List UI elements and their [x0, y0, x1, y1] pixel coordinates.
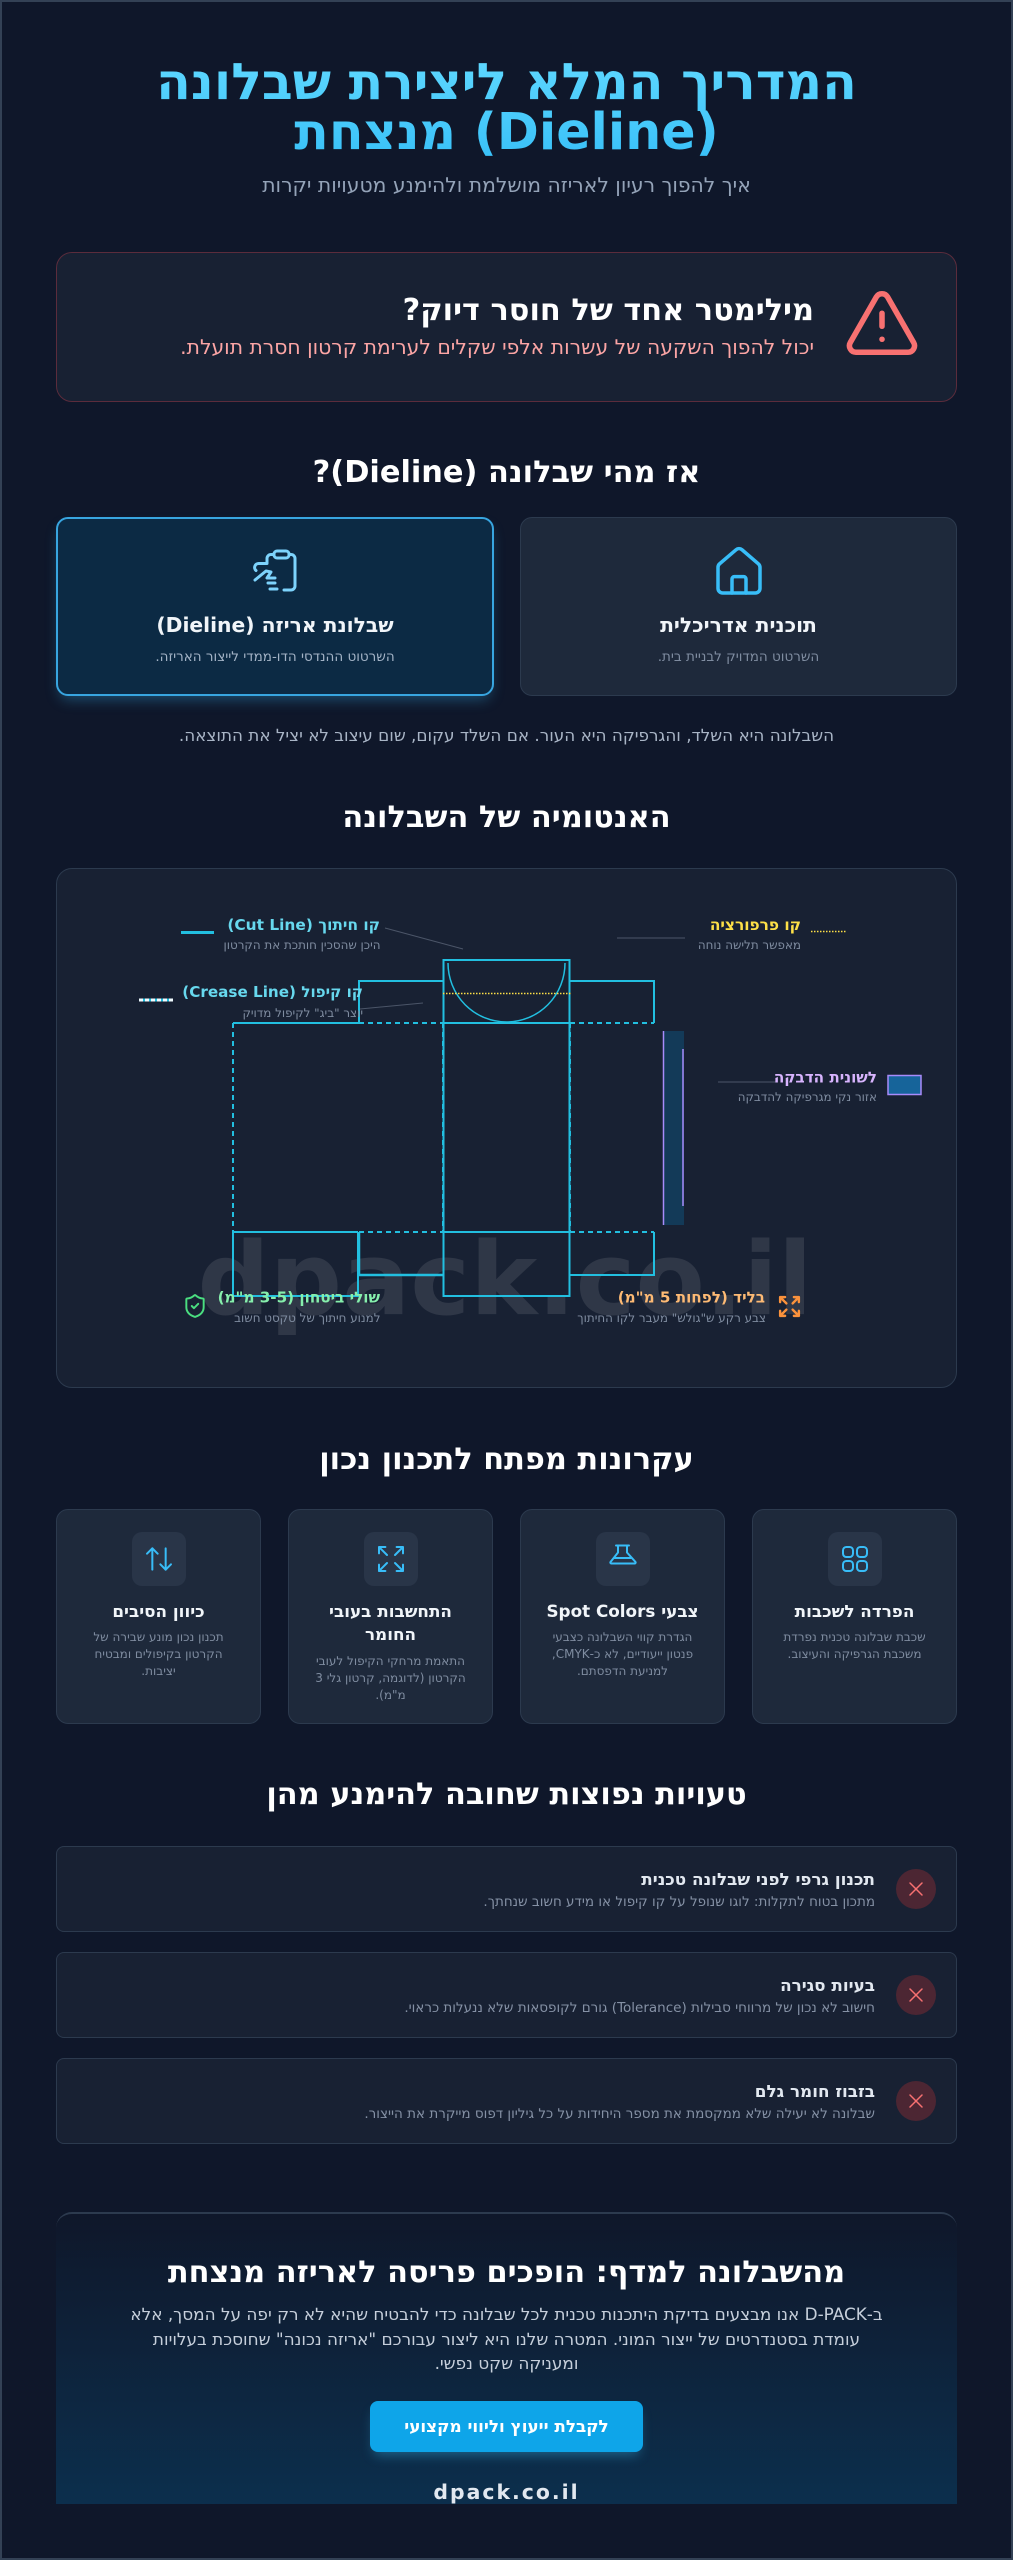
card description: השרטוט ההנדסי הדו-ממדי לייצור האריזה. [155, 649, 395, 665]
card text: פנטון ייעודיים, לא כ-CMYK, [552, 1647, 693, 1661]
icon: x [896, 1975, 936, 2015]
title: המדריך המלא ליצירת שבלונה [156, 52, 857, 111]
icon: x [896, 2081, 936, 2121]
perforation line [443, 992, 571, 994]
CTA text: ומעניקה שקט נפשי. [435, 2353, 578, 2373]
leader lines [360, 928, 777, 1082]
card text: משכבת הגרפיקה והעיצוב. [788, 1647, 922, 1661]
card title: הפרדה לשכבות [795, 1601, 914, 1621]
mistake text: מתכון בטוח לתקלות: לוגו שנופל על קו קיפול או מידע חשוב שנחתך. [483, 1894, 875, 1910]
legend: perforation line [698, 916, 846, 952]
warning text: יכול להפוך השקעה של עשרות אלפי שקלים לערימת קרטון חסרת תועלת. [180, 335, 814, 359]
mistake text: שבלונה לא יעילה שלא ממקסמת את מספר היחידות על כל גיליון דפוס מייקרת את הייצור. [364, 2106, 875, 2122]
panel: warning callout [56, 252, 957, 402]
card text: מ"מ). [375, 1688, 406, 1702]
legend: safety margin: שולי ביטחון (3-5 מ"מ) [218, 1288, 380, 1306]
card text: תכנון נכון מונע שבירה של [93, 1630, 224, 1644]
icon: up down arrows [132, 1532, 186, 1586]
panel: layers card [752, 1509, 957, 1724]
card title: שבלונת אריזה (Dieline) [156, 613, 394, 637]
legend: crease line: יוצר "ביג" לקיפול מדויק [242, 1006, 363, 1020]
panel: call to action [56, 2212, 957, 2504]
card text [783, 1630, 926, 1661]
panel: dieline card [56, 517, 494, 696]
mistake title: בזבוז חומר גלם [755, 2081, 875, 2101]
card text: למניעת הדפסתם. [577, 1664, 668, 1678]
CTA button: לקבלת ייעוץ וליווי מקצועי [404, 2416, 609, 2436]
card text: שכבת שבלונה טכנית נפרדת [783, 1630, 926, 1644]
icon: clipboard pen [253, 550, 296, 592]
legend: bleed: בליד (לפחות 5 מ"מ) [618, 1288, 765, 1306]
card title: כיוון הסיבים [112, 1601, 205, 1621]
mistake text: חישוב לא נכון של מרווחי סבילות (Tolerance) גורם לקופסאות שלא ננעלות כראוי. [404, 2000, 875, 2016]
panel: mistake 1 [56, 1846, 957, 1932]
card text: הקרטון (לדוגמה, קרטון גלי 3 [315, 1671, 466, 1685]
panel: anatomy diagram [56, 868, 957, 1388]
card description: השרטוט המדויק לבניית בית. [658, 649, 819, 665]
card text [552, 1630, 693, 1678]
card title: צבעי Spot Colors [546, 1601, 699, 1621]
explanatory text: השבלונה היא השלד, והגרפיקה היא העור. אם השלד עקום, שום עיצוב לא יציל את התוצאה. [179, 725, 834, 745]
card text: התאמת מרחקי הקיפול לעובי [316, 1654, 465, 1668]
heading: common mistakes: טעויות נפוצות שחובה להימנע מהן [266, 1777, 747, 1812]
card text: הקרטון בקיפולים ומבטיח [94, 1647, 223, 1661]
legend: cut line [181, 916, 380, 952]
legend: cut line: קו חיתוך (Cut Line) [227, 916, 380, 934]
title [0, 57, 1013, 161]
card text: הגדרת קווי השבלונה כצבעי [553, 1630, 692, 1644]
title: (Dieline) מנצחת [294, 102, 719, 161]
legend: bleed: צבע רקע ש"גולש" מעבר לקו החיתוך [577, 1311, 766, 1325]
legend: crease line: קו קיפול (Crease Line) [182, 983, 363, 1001]
warning heading: מילימטר אחד של חוסר דיוק? [403, 293, 814, 328]
CTA heading: מהשבלונה למדף: הופכים פריסה לאריזה מנצחת [168, 2255, 845, 2290]
card text [315, 1654, 466, 1702]
legend: safety margin [186, 1288, 380, 1325]
card title [329, 1601, 452, 1644]
panel: architectural plan card [520, 517, 957, 696]
icon: house [716, 546, 762, 595]
legend: perforation line: מאפשר תלישה נוחה [698, 938, 801, 952]
CTA text [130, 2304, 883, 2373]
panel: mistake 2 [56, 1952, 957, 2038]
card title: תוכנית אדריכלית [660, 613, 817, 637]
icon: warning triangle [846, 291, 918, 355]
CTA button [370, 2401, 643, 2452]
panel: mistake 3 [56, 2058, 957, 2144]
legend: cut line: היכן שהסכין חותכת את הקרטון [224, 938, 380, 952]
CTA text: עומדת בסטנדרטים של ייצור המוני. המטרה שלנו היא ליצור עבורכם "אריזה נכונה" שחוסכת בעלויות [153, 2328, 860, 2348]
heading: key principles: עקרונות מפתח לתכנון נכון [319, 1442, 694, 1477]
legend: glue tab: אזור נקי מגרפיקה להדבקה [738, 1090, 877, 1104]
heading: what is a dieline: אז מהי שבלונה (Dieline)? [313, 455, 700, 490]
icon: grid [828, 1532, 882, 1586]
legend: crease line [139, 983, 363, 1020]
legend: glue tab: לשונית הדבקה [774, 1068, 877, 1086]
subtitle: איך להפוך רעיון לאריזה מושלמת ולהימנע מטעויות יקרות [262, 173, 751, 197]
legend: safety margin: למנוע חיתוך של טקסט חשוב [234, 1311, 380, 1325]
watermark: dpack.co.il [197, 1220, 813, 1338]
legend: perforation line: קו פרפורציה [710, 916, 801, 934]
card text [93, 1630, 224, 1678]
legend: glue tab [738, 1068, 921, 1104]
card title: החומר [365, 1624, 416, 1644]
mistake title: תכנון גרפי לפני שבלונה טכנית [641, 1869, 875, 1889]
panel: material thickness card [288, 1509, 493, 1724]
brand url: dpack.co.il [433, 2480, 580, 2504]
card title: התחשבות בעובי [329, 1601, 452, 1621]
mistake title: בעיות סגירה [780, 1975, 875, 1995]
card text: יציבות. [141, 1664, 176, 1678]
legend: bleed [577, 1288, 799, 1325]
dieline drawing [233, 960, 654, 1296]
panel: spot colors card [520, 1509, 725, 1724]
icon: expand arrows [364, 1532, 418, 1586]
glue tab [663, 1031, 684, 1225]
CTA text: ב-D-PACK אנו מבצעים בדיקת היתכנות טכנית לכל שבלונה כדי להבטיח שהיא לא רק יפה על המסך, אלא [130, 2304, 883, 2324]
heading: anatomy: האנטומיה של השבלונה [342, 800, 671, 835]
icon: flask [596, 1532, 650, 1586]
panel: grain direction card [56, 1509, 261, 1724]
icon: x [896, 1869, 936, 1909]
